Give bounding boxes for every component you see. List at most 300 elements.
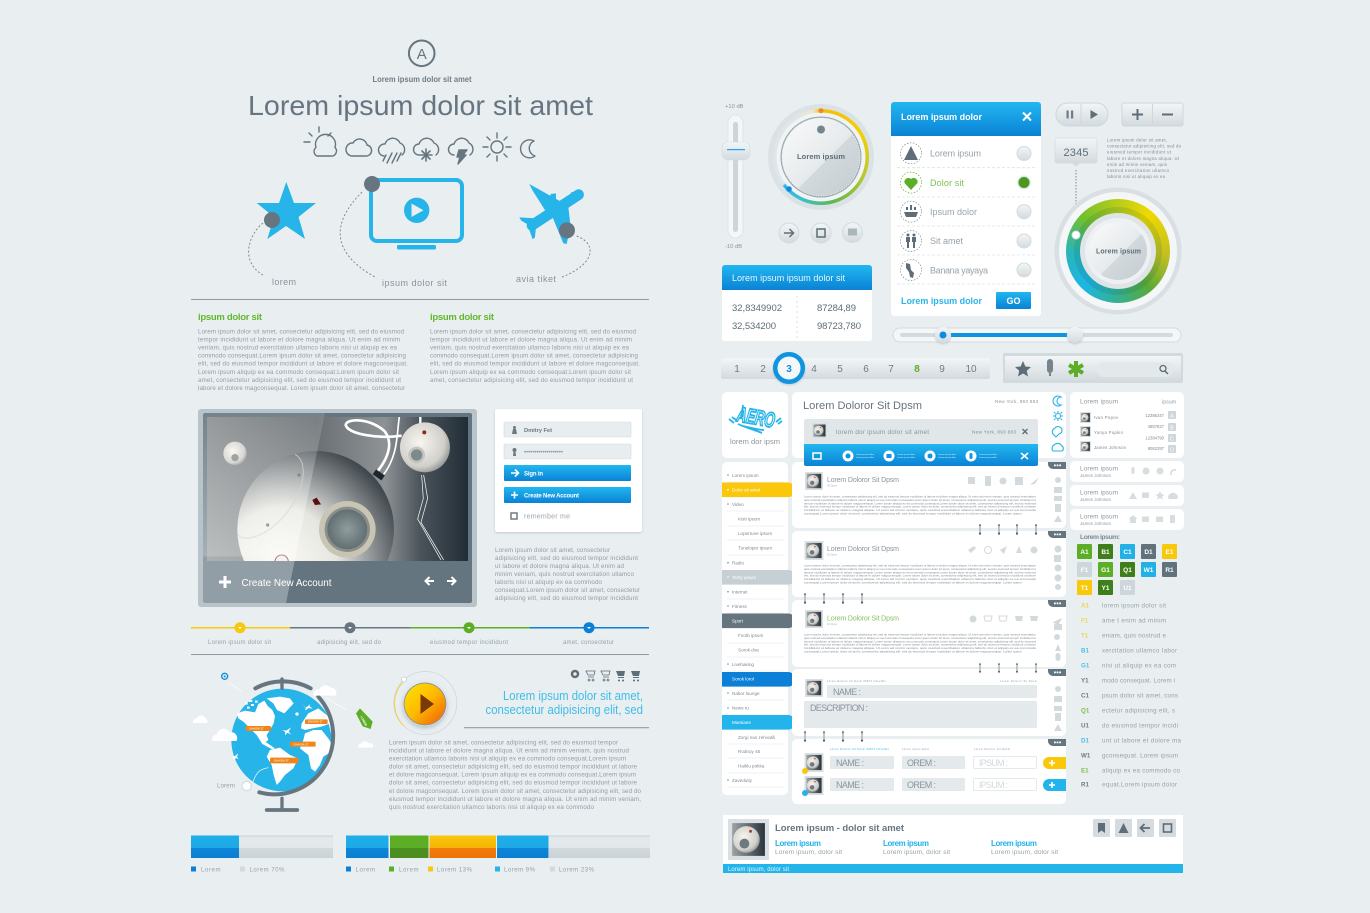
legend: Lorem 9% bbox=[504, 868, 536, 874]
menu labels bbox=[732, 473, 775, 783]
continents: DHAGIA 37 bbox=[274, 759, 289, 763]
card: profile row one: James Johnson bbox=[1080, 473, 1112, 478]
search field bbox=[1097, 362, 1173, 377]
tag grid: T1 bbox=[1081, 585, 1089, 592]
card: coordinates table: Lorem ipsum ipsum dolor sit bbox=[732, 273, 845, 283]
pagination: 1 bbox=[734, 364, 740, 375]
contact: Yanya Pupkin: 4857827 bbox=[1148, 424, 1165, 429]
icon: airplane bbox=[519, 184, 590, 277]
tag legend list: eniam, quis nostrud e bbox=[1102, 632, 1167, 640]
tag grid: F1 bbox=[1081, 567, 1089, 574]
text block: right column bbox=[430, 312, 640, 384]
menu labels: News ru bbox=[732, 706, 749, 710]
heading: tag list: Lorem ipsum: bbox=[1080, 534, 1120, 541]
row one: OREM : bbox=[907, 758, 936, 768]
footer label: Lorem ipsum dolor bbox=[901, 296, 982, 306]
panel: logo: lorem dor ipsm bbox=[730, 437, 780, 446]
input: password: ••••••••••••••••••• bbox=[524, 450, 563, 456]
button: sign in: Sign in bbox=[524, 472, 543, 478]
tag grid bbox=[1077, 544, 1177, 595]
clouds bbox=[193, 685, 373, 748]
body text: Lorem ipsum dolor sit amet, consectetur adipisicing elit, sed do eiusmod tempor incididunt ut labore et dolore magna aliqua. Ut enim ad minim veniam, quis nostrud exercitation bbox=[804, 632, 1036, 636]
porthole bbox=[319, 501, 376, 558]
contact: Yanya Pupkin bbox=[1080, 423, 1176, 437]
panel: side menu bbox=[722, 462, 795, 795]
side rail: gray icons bbox=[1053, 477, 1062, 731]
tag legend list: D1 bbox=[1081, 738, 1089, 744]
body text: Lorem ipsum dolor sit amet, consectetur adipisicing elit, sed do eiusmod tempor incididunt ut labore et dolore magna aliqua. Ut enim ad minim veniam, quis nostrud exercitation bbox=[804, 494, 1036, 498]
panel: option list dialog bbox=[891, 102, 1041, 316]
footer thumbnail bbox=[728, 819, 769, 860]
footer column 3: Lorem ipsum, dolor sit bbox=[991, 849, 1058, 856]
media controls: pause and play bbox=[1056, 103, 1108, 126]
footer band: Lorem ipsum, dolor sit bbox=[728, 867, 789, 873]
footer action icons bbox=[1093, 819, 1176, 837]
menu bullets bbox=[727, 474, 729, 781]
text block: tooltip note bbox=[1107, 138, 1182, 179]
input: name bbox=[827, 685, 1037, 698]
icons row bbox=[968, 546, 1038, 554]
icon: sun bbox=[483, 133, 511, 161]
body text: tempor incididunt ut labore et dolore magconsequat. Lorem ipsum aliquip ex ea commodo consequat.Lorem ipsum dolor sit amet, consectetur adipisicing elit, sed do eiusmod bbox=[804, 570, 1036, 574]
subtitle: Lorem ipsum dolor sit amet bbox=[372, 75, 472, 84]
input: description: DESCRIPTION : bbox=[810, 703, 868, 713]
legend: Lorem bbox=[399, 868, 418, 874]
legend: Lorem 13% bbox=[437, 868, 473, 874]
photo bbox=[207, 417, 468, 561]
text block: left column: tempor incididunt ut labore et dolore magna aliqua. Ut enim ad minim bbox=[198, 337, 400, 344]
card: coordinates table: 87284,89 bbox=[817, 303, 856, 314]
option: dolor sit (selected) bbox=[900, 172, 1031, 193]
body text: Lorem ipsum dolor sit amet, consectetur adipisicing elit, sed do eiusmod tempor incididunt ut labore et dolore magna aliqua. Ut enim ad minim veniam, quis nostrud exercitation bbox=[804, 564, 1036, 568]
contact: James Johnson bbox=[1080, 434, 1176, 454]
contact: James Johnson: C bbox=[1170, 436, 1174, 442]
row one: IPSUM : bbox=[979, 758, 1008, 768]
pagination: 9 bbox=[939, 364, 945, 375]
body text: tempor incididunt ut labore et dolore magconsequat. Lorem ipsum aliquip ex ea commodo consequat.Lorem ipsum dolor sit amet, consectetur adipisicing elit, sed do eiusmod bbox=[804, 639, 1036, 643]
menu labels: Tezty ipsum bbox=[732, 575, 756, 580]
contact: James Johnson: 12384790 bbox=[1145, 436, 1165, 440]
text block: left column: Lorem ipsum aliquip ex ea commodo consequat.Lorem ipsum dolor sit bbox=[198, 369, 399, 376]
contact: Ivan Popov: A bbox=[1170, 414, 1174, 420]
text block: globe description: dolor sit amet, consectetur adipisicing elit, sed do eiusmod tempor incididunt ut labore bbox=[389, 764, 638, 771]
stacked bar: segments bbox=[346, 836, 650, 874]
card: contact rows: Lorem ipsum dolor bbox=[902, 748, 929, 751]
search result bar bbox=[804, 419, 1038, 444]
body text: incididunt ut labore et dolore magna aliqua. Ut enim ad minim veniam, quis nostrud exercitation ullamco laboris nisi ut aliquip ex ea commodo bbox=[804, 508, 1036, 512]
icon: microphone bbox=[1047, 359, 1053, 376]
menu labels: Kisti ipsum bbox=[738, 516, 760, 522]
heading: blue right-aligned bbox=[486, 689, 643, 717]
text block: globe description: et dolore magconsequat. Lorem ipsum dolor sit amet, consectetur adipisicing elit, sed do bbox=[389, 788, 642, 795]
controls: plus and minus bbox=[1122, 103, 1183, 126]
tag legend list: B1 bbox=[1081, 648, 1089, 654]
card: article two: Sit Dpsm bbox=[827, 554, 837, 556]
step timeline bbox=[191, 622, 649, 646]
step 4 bbox=[563, 622, 614, 646]
icon: snow cloud bbox=[414, 138, 439, 161]
card: coordinates table: 98723,780 bbox=[817, 321, 861, 332]
blue action bar: Lorem ipsum dolor bbox=[938, 453, 956, 456]
tubes bbox=[346, 420, 402, 472]
blue action bar: Lorem ipsum dolor bbox=[897, 453, 915, 456]
menu labels: Rodnoy 45 bbox=[738, 749, 761, 754]
text block: login note: minim veniam, quis nostrud exercitation ullamco bbox=[495, 571, 635, 578]
tag legend list: ectetur adipisicing elit, s bbox=[1102, 708, 1175, 714]
legend: Lorem bbox=[356, 868, 375, 874]
tooltip: 2345 bbox=[1055, 138, 1097, 235]
text block: right column: Lorem ipsum dolor sit amet, consectetur adipisicing elit, sed do eiusmod bbox=[430, 328, 637, 336]
stacked bar: single bbox=[191, 836, 333, 874]
card: name and description form: Lorem Doloror Sit Dpsm 09874 klzxefkln bbox=[827, 680, 887, 683]
text block: left column: amet, consectetur adipisicing elit, sed do eiusmod tempor incididunt ut bbox=[198, 377, 401, 384]
text block: tooltip note: nostrud exercitation ullamco bbox=[1107, 168, 1170, 173]
panel: contacts: ipsum bbox=[1162, 400, 1176, 406]
text block: tooltip note: consectetur adipisicing elit, sed do bbox=[1107, 144, 1182, 149]
blue action bar: Lorem ipsum dolor bbox=[897, 456, 915, 459]
contact: Yanya Pupkin: Yanya Pupkin bbox=[1094, 430, 1124, 435]
tag legend list: equat.Lorem ipsum dolor bbox=[1102, 782, 1177, 788]
card: article one: Sit Dpsm bbox=[827, 484, 837, 488]
menu labels: Marsiane bbox=[732, 720, 751, 725]
step 2 bbox=[317, 622, 382, 646]
pin icon bbox=[222, 673, 228, 679]
volume slider bbox=[722, 104, 750, 250]
globe illustration bbox=[193, 673, 373, 810]
menu labels: Radio bbox=[732, 560, 744, 566]
tag legend list: T1 bbox=[1081, 632, 1089, 640]
tag legend list bbox=[1081, 602, 1182, 788]
text block: right column: amet, consectetur adipisicing elit, sed do eiusmod tempor incididunt ut bbox=[430, 377, 633, 384]
search result bar: lorem dor ipsum dolor sit amet bbox=[836, 429, 929, 436]
text block: login note: Lorem ipsum dolor sit amet, consectetur bbox=[495, 547, 610, 554]
contact: James Johnson: James Johnson bbox=[1094, 445, 1127, 450]
row one bbox=[802, 753, 1066, 774]
text block: globe description: exercitation ullamco laboris nisi ut aliquip ex ea commodo consequat.Lorem ipsum bbox=[389, 756, 626, 763]
main title: Lorem ipsum dolor sit amet bbox=[248, 90, 593, 121]
step 3 bbox=[430, 622, 508, 646]
tag legend list: modo consequat. Lorem i bbox=[1102, 678, 1175, 684]
text block: globe description: quis nostrud exercitation ullamco laboris nisi ut aliquip ex ea commodo bbox=[389, 804, 595, 811]
icon: star with callout bbox=[249, 182, 316, 275]
label: lorem: lorem bbox=[272, 277, 296, 287]
contact: Yanya Pupkin: B bbox=[1170, 426, 1174, 432]
icons row bbox=[970, 616, 1038, 622]
large sphere bbox=[237, 451, 394, 561]
contact: Ivan Popov: Ivan Popov bbox=[1094, 415, 1119, 420]
toolbar icons: gear and carts bbox=[572, 671, 640, 681]
option: banana yayaya: Banana yayaya bbox=[930, 266, 988, 276]
icon: cloud bbox=[346, 139, 372, 156]
tag legend list: do eiusmod tempor incidi bbox=[1102, 722, 1178, 730]
footer column 2: Lorem ipsum, dolor sit bbox=[883, 849, 950, 856]
panel: login form bbox=[495, 409, 642, 532]
round buttons bbox=[779, 222, 862, 243]
price tag: LOREM bbox=[359, 715, 368, 727]
tag legend list: nisi ut aliquip ex ea com bbox=[1102, 662, 1176, 670]
continents: DHAGIA 37 bbox=[308, 720, 323, 724]
step 4: amet, consectetur bbox=[563, 640, 614, 646]
tag grid: B1 bbox=[1101, 549, 1110, 556]
text block: tooltip note: laboris nisi ut aliquip ex ea bbox=[1107, 174, 1166, 179]
text block: tooltip note: enim ad minim veniam, quis bbox=[1107, 162, 1167, 167]
ring binder clips bbox=[804, 524, 1037, 742]
body text: consequat.Lorem ipsum dolor sit amet, consectetur adipisicing elit, sed do eiusmod tempor incididunt ut labore et dolore magconsequat. Lorem ipsum bbox=[804, 512, 1023, 516]
text block: login note: adipisicing elit, sed do eiusmod tempor incididunt bbox=[495, 555, 638, 562]
footer band bbox=[723, 864, 1183, 873]
option: ipsum dolor bbox=[900, 201, 1031, 222]
tag grid: W1 bbox=[1144, 567, 1154, 574]
step 2: adipisicing elit, sed do bbox=[317, 640, 382, 646]
footer column 2: Lorem ipsum bbox=[883, 839, 929, 848]
dial: color ring knob: Lorem ipsum bbox=[1096, 248, 1141, 256]
body text bbox=[804, 632, 1036, 654]
tag legend list: E1 bbox=[1081, 768, 1089, 774]
menu labels: Zorgi nas zehvatili bbox=[738, 735, 775, 740]
blue action bar: Lorem ipsum dolor bbox=[856, 456, 874, 459]
row two: NAME : bbox=[836, 780, 864, 790]
tag legend list: W1 bbox=[1081, 752, 1091, 760]
price tag bbox=[356, 708, 373, 729]
text block: login note: ut labore et dolore magna aliqua. Ut enim ad bbox=[495, 563, 625, 570]
text block: login note: adipisicing elit, sed do eiusmod tempor incididunt bbox=[495, 595, 638, 602]
checkbox: remember me: remember me bbox=[524, 514, 570, 520]
volume slider: +10 dB bbox=[725, 104, 744, 110]
panel: photo slider bbox=[198, 409, 477, 608]
blue action bar: Lorem ipsum dolor bbox=[856, 453, 874, 456]
option: ipsum dolor: Ipsum dolor bbox=[930, 207, 977, 217]
continents: DHAGIA 37 bbox=[249, 727, 264, 731]
text block: globe description: Lorem ipsum dolor sit amet, consectetur adipisicing elit, sed do eiusmod tempor bbox=[389, 740, 618, 746]
side rail: weather icons bbox=[1052, 396, 1063, 451]
input: description bbox=[804, 701, 1037, 728]
tag grid: Q1 bbox=[1123, 567, 1132, 574]
blue action bar: Lorem ipsum dolor bbox=[979, 456, 997, 459]
text block: right column: Lorem ipsum aliquip ex ea commodo consequat.Lorem ipsum dolor sit bbox=[430, 369, 631, 376]
current page bbox=[775, 354, 803, 382]
text block: globe description: incididunt ut labore et dolore magna aliqua. Ut enim ad minim veniam, quis nostrud bbox=[389, 748, 630, 754]
tag grid: G1 bbox=[1101, 567, 1110, 574]
card: article one: Lorem Doloror Sit Dpsm bbox=[827, 477, 899, 484]
contact: James Johnson: 9082397 bbox=[1148, 446, 1165, 451]
footer column 3: Lorem ipsum bbox=[991, 839, 1037, 848]
tag legend list: C1 bbox=[1081, 692, 1089, 700]
card: article two: Lorem Doloror Sit Dpsm bbox=[827, 546, 899, 553]
tag legend list: A1 bbox=[1081, 602, 1089, 610]
tag legend list: ame t enim ad minim bbox=[1102, 618, 1166, 624]
icon: previous and next arrows bbox=[426, 577, 456, 585]
text block: left column: Lorem ipsum dolor sit amet, consectetur adipisicing elit, sed do eiusmod bbox=[198, 328, 405, 336]
option: lorem ipsum: Lorem ipsum bbox=[930, 148, 981, 158]
pagination: 2 bbox=[760, 364, 766, 375]
tag grid: E1 bbox=[1166, 549, 1174, 556]
legend: Lorem bbox=[201, 868, 220, 874]
card: profile row three bbox=[1070, 509, 1184, 530]
icon: close bbox=[1023, 112, 1031, 120]
option: lorem ipsum bbox=[900, 143, 1031, 164]
legend bbox=[346, 866, 595, 874]
pagination: 6 bbox=[863, 364, 869, 375]
location marker: Lorem bbox=[217, 783, 235, 790]
body text: quis nostrud exercitation ullamco laboris nisi ut aliquip ex ea commodo consequat.Lorem ipsum dolor sit amet, consectetur adipisicing elit, sed do eiusmod tempor incididunt ut bbox=[804, 498, 1036, 502]
card: profile row two: Lorem ipsum bbox=[1080, 490, 1118, 496]
weather icons row bbox=[304, 127, 535, 164]
text block: tooltip note: eiusmod tempor incididunt ut bbox=[1107, 150, 1172, 155]
menu labels: Dolor sit amet bbox=[732, 488, 761, 492]
text block: login note: consequat.Lorem ipsum dolor sit amet, consectetur bbox=[495, 587, 640, 594]
card: profile row three: Lorem ipsum bbox=[1080, 514, 1118, 520]
label: ipsum dolor sit: ipsum dolor sit bbox=[382, 278, 447, 288]
legend: Lorem 23% bbox=[559, 868, 595, 874]
blue action bar: Lorem ipsum dolor bbox=[938, 456, 956, 459]
body text: tempor incididunt ut labore et dolore magconsequat. Lorem ipsum aliquip ex ea commodo consequat.Lorem ipsum dolor sit amet, consectetur adipisicing elit, sed do eiusmod bbox=[804, 501, 1036, 505]
text block: globe description: eiusmod tempor incididunt ut labore et dolore magna aliqua. Ut enim ad minim veniam, bbox=[389, 796, 641, 803]
pagination: 10 bbox=[965, 364, 977, 375]
body text: elit, sed do eiusmod tempor incididunt ut labore et dolore magconsequat. Lorem ipsum dolor sit amet, consectetur adipisicing elit, sed do eiusmod tempor incididunt ut labore bbox=[804, 574, 1036, 578]
card: profile row two: James Johnson bbox=[1080, 497, 1112, 502]
toolbar: search bbox=[1003, 353, 1183, 383]
panel: contacts: Lorem ipsum bbox=[1080, 398, 1118, 406]
range slider bbox=[893, 327, 1181, 343]
text block: left column: veniam, quis nostrud exercitation ullamco laboris nisi ut aliquip ex ea bbox=[198, 345, 398, 352]
heading: blue right-aligned: consectetur adipisicing elit, sed bbox=[486, 703, 643, 717]
card: article two bbox=[792, 531, 1066, 597]
caption: Create New Account bbox=[242, 578, 332, 589]
pagination: 4 bbox=[811, 364, 817, 375]
icon: plus bbox=[219, 576, 231, 588]
option: dolor sit (selected): Dolor sit bbox=[930, 178, 964, 188]
tag grid: Y1 bbox=[1102, 585, 1110, 592]
card: article one bbox=[792, 462, 1066, 528]
menu labels: Haiklu pokka bbox=[738, 764, 765, 768]
tag legend list: lorem ipsum dolor sit bbox=[1102, 602, 1166, 610]
glass overlay bbox=[203, 413, 325, 603]
option: sit amet: Sit amet bbox=[930, 236, 963, 246]
card: profile row one: Lorem ipsum bbox=[1080, 466, 1118, 472]
row two: IPSUM : bbox=[979, 780, 1008, 790]
continents: DHAGIA 37 bbox=[294, 742, 309, 746]
button: stop bbox=[811, 223, 831, 243]
label: avia tiket: avia tiket bbox=[516, 274, 556, 284]
legend bbox=[191, 866, 285, 874]
tag grid: D1 bbox=[1144, 549, 1153, 556]
body text: quis nostrud exercitation ullamco laboris nisi ut aliquip ex ea commodo consequat.Lorem ipsum dolor sit amet, consectetur adipisicing elit, sed do eiusmod tempor incididunt ut bbox=[804, 567, 1036, 571]
button: sign in bbox=[504, 465, 631, 481]
icon: green asterisk bbox=[1069, 361, 1083, 377]
card: coordinates table: 32,8349902 bbox=[732, 303, 782, 314]
menu labels: Sport bbox=[732, 618, 744, 624]
graffiti logo: AERO bbox=[735, 403, 777, 433]
menu labels: Footb ipsum bbox=[738, 633, 763, 638]
text block: left column: commodo consequat.Lorem ipsum dolor sit amet, consectetur adipisicing bbox=[198, 353, 407, 360]
text block: right column: veniam, quis nostrud exercitation ullamco laboris nisi ut aliquip ex ea bbox=[430, 345, 630, 352]
tag legend list: U1 bbox=[1081, 722, 1089, 730]
card: coordinates table bbox=[722, 265, 872, 341]
contact: Ivan Popov bbox=[1080, 411, 1176, 423]
option: sit amet bbox=[900, 230, 1031, 252]
pagination bbox=[721, 354, 990, 382]
option: banana yayaya bbox=[900, 260, 1031, 280]
input: username bbox=[504, 422, 631, 437]
input: name: NAME : bbox=[833, 687, 861, 697]
card: contact rows: Lorem Doloror Sit Dpsm 09874 klzxefkln bbox=[830, 748, 890, 751]
card: contact rows bbox=[792, 739, 1066, 804]
contact: Ivan Popov: 12386347 bbox=[1145, 413, 1165, 418]
card: name and description form: Lorem Doloror Sit Dpsm bbox=[1000, 680, 1037, 683]
panel: header: New York, 893 883 bbox=[995, 399, 1038, 404]
tag legend list: R1 bbox=[1081, 782, 1089, 788]
tag legend list: unt ut labore et dolore ma bbox=[1102, 738, 1182, 744]
button: create account bbox=[504, 487, 631, 503]
volume slider: -10 dB bbox=[725, 244, 742, 250]
card: contact rows: Lorem Doloror Sit Dpsm bbox=[974, 748, 1010, 751]
heading: blue right-aligned: Lorem ipsum dolor sit amet, bbox=[503, 689, 643, 703]
icon: moon bbox=[521, 140, 535, 158]
body text: quis nostrud exercitation ullamco laboris nisi ut aliquip ex ea commodo consequat.Lorem ipsum dolor sit amet, consectetur adipisicing elit, sed do eiusmod tempor incididunt ut bbox=[804, 636, 1036, 640]
body text: elit, sed do eiusmod tempor incididunt ut labore et dolore magconsequat. Lorem ipsum dolor sit amet, consectetur adipisicing elit, sed do eiusmod tempor incididunt ut labore bbox=[804, 505, 1036, 509]
small sphere bbox=[223, 442, 247, 465]
logo badge: circled A bbox=[409, 40, 435, 66]
footer column 3 bbox=[991, 839, 1058, 856]
pagination: 8 bbox=[914, 364, 920, 375]
menu labels: Video bbox=[732, 502, 744, 507]
step 1 bbox=[208, 622, 271, 646]
card: profile row one bbox=[1070, 461, 1184, 482]
tag legend list: G1 bbox=[1081, 662, 1090, 670]
legend: Lorem 70% bbox=[250, 868, 285, 874]
button: create account: Create New Account bbox=[524, 494, 579, 500]
button: arrow bbox=[779, 223, 799, 243]
card: article three: Sit Dpsm bbox=[827, 623, 837, 626]
dial: volume knob: Lorem ipsum bbox=[797, 152, 845, 161]
blue action bar: Lorem ipsum dolor bbox=[979, 453, 997, 456]
icon: monitor with play button bbox=[340, 176, 462, 277]
text block: globe description: dolor sit amet, consectetur adipisicing elit, sed do eiusmod tempor incididunt ut labore bbox=[389, 780, 638, 787]
continents bbox=[232, 697, 334, 785]
menu labels: Lopertune ipsum bbox=[738, 531, 772, 536]
tag grid: A1 bbox=[1080, 549, 1089, 556]
text block: login note: laboris nisi ut aliquip ex ea commodo bbox=[495, 579, 603, 586]
blue action bar bbox=[804, 444, 1038, 466]
card: name and description form bbox=[792, 669, 1066, 736]
tag grid: C1 bbox=[1123, 549, 1132, 556]
current page: 3 bbox=[786, 364, 792, 375]
card: article three: Lorem Doloror Sit Dpsm bbox=[827, 616, 899, 622]
play button dial bbox=[394, 672, 457, 734]
body text: consequat.Lorem ipsum dolor sit amet, consectetur adipisicing elit, sed do eiusmod tempor incididunt ut labore et dolore magconsequat. Lorem ipsum bbox=[804, 580, 1023, 584]
card: profile row three: James Johnson bbox=[1080, 521, 1112, 526]
logo badge: circled A: A bbox=[417, 46, 427, 63]
body text: elit, sed do eiusmod tempor incididunt ut labore et dolore magconsequat. Lorem ipsum dolor sit amet, consectetur adipisicing elit, sed do eiusmod tempor incididunt ut labore bbox=[804, 643, 1036, 647]
footer column 1: Lorem ipsum bbox=[775, 839, 821, 848]
icon: storm cloud bbox=[448, 138, 473, 164]
menu labels: Livehaking bbox=[732, 662, 754, 667]
heading: left column: ipsum dolor sit bbox=[198, 312, 263, 323]
tag legend list: psum dolor sit amet, cons bbox=[1102, 692, 1178, 700]
tag grid: U1 bbox=[1123, 585, 1132, 592]
tag legend list: Q1 bbox=[1081, 708, 1090, 714]
footer column 1: Lorem ipsum, dolor sit bbox=[775, 849, 842, 856]
button: go bbox=[996, 292, 1031, 309]
heading: right column: ipsum dolor sit bbox=[430, 312, 495, 323]
row one: NAME : bbox=[836, 758, 864, 768]
text block: tooltip note: Lorem ipsum dolor sit amet, bbox=[1107, 138, 1167, 142]
tag legend list: xercitation ullamco labor bbox=[1102, 648, 1177, 654]
body text: incididunt ut labore et dolore magna aliqua. Ut enim ad minim veniam, quis nostrud exercitation ullamco laboris nisi ut aliquip ex ea commodo bbox=[804, 577, 1036, 581]
text block: left column bbox=[198, 312, 408, 392]
footer panel bbox=[723, 815, 1183, 873]
panel: header bbox=[792, 392, 1066, 466]
